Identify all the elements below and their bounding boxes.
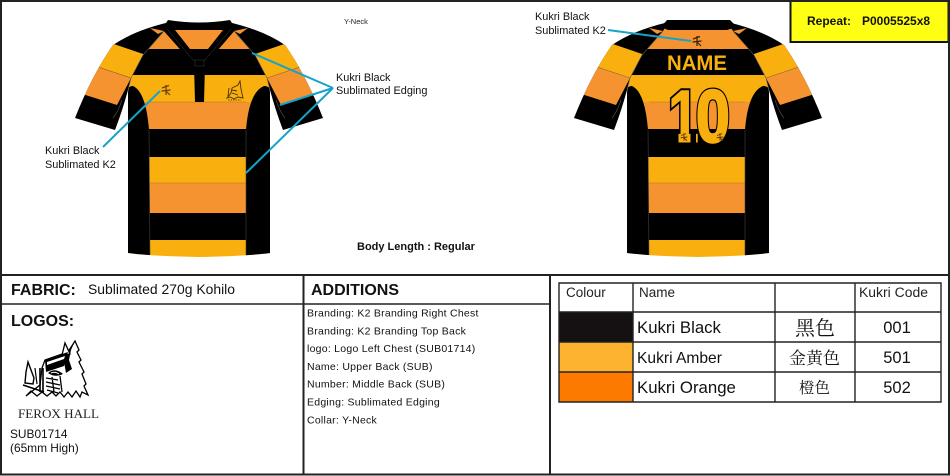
callout: back K2: Sublimated K2 [535, 25, 606, 37]
collar and placket [162, 20, 236, 102]
row: amber: Kukri Amber [637, 350, 722, 367]
number print: 1 [668, 75, 699, 158]
repeat badge [790, 1, 948, 42]
row: orange: 橙色 [799, 376, 830, 398]
neck label: Y-Neck [344, 17, 368, 26]
k2 chest mark [162, 85, 170, 95]
row: black [637, 312, 911, 341]
row: orange: 502 [883, 379, 911, 397]
panel: additions: ADDITIONS [311, 282, 399, 299]
name print: NAME [667, 52, 727, 75]
chest crest [227, 81, 243, 100]
logo name: FEROX HALL [18, 406, 99, 421]
number print: 1 [668, 75, 699, 158]
k2 number marks [681, 133, 723, 141]
body length label: Body Length : Regular [357, 241, 476, 253]
additions list: Edging: Sublimated Edging [307, 396, 440, 408]
colour table [559, 283, 941, 402]
number print: 0 [696, 76, 730, 158]
table header: Colour [566, 285, 606, 300]
row: orange: Kukri Orange [637, 378, 736, 397]
repeat badge: Repeat: [807, 14, 851, 28]
additions list: Collar: Y-Neck [307, 414, 378, 426]
row: orange [637, 376, 911, 398]
callout: edging: Sublimated Edging [336, 85, 427, 97]
row: amber: 501 [883, 349, 911, 367]
number print: 0 [696, 76, 730, 158]
panel: fabric: Sublimated 270g Kohilo [88, 282, 235, 297]
number print [660, 75, 730, 158]
panel: logos [10, 313, 99, 455]
additions list: Branding: K2 Branding Right Chest [307, 308, 479, 320]
panel: additions [307, 282, 479, 426]
callout: front K2: Sublimated K2 [45, 159, 116, 171]
callout: back K2: Kukri Black [535, 11, 590, 23]
additions list: Number: Middle Back (SUB) [307, 379, 445, 391]
panel: fabric [11, 282, 235, 299]
back collar [661, 20, 737, 30]
panel: logos: LOGOS: [11, 313, 74, 330]
callout lines [103, 30, 691, 173]
front jersey [75, 20, 323, 258]
table header: Kukri Code [859, 285, 928, 300]
additions list: Name: Upper Back (SUB) [307, 361, 433, 373]
row: black: Kukri Black [637, 318, 722, 337]
additions list: logo: Logo Left Chest (SUB01714) [307, 343, 476, 355]
row: amber [637, 344, 911, 369]
panel: fabric: FABRIC: [11, 282, 76, 299]
callout: front K2: Kukri Black [45, 145, 100, 157]
row: black: 001 [883, 319, 911, 337]
table header: Name [639, 285, 675, 300]
back jersey [574, 20, 822, 258]
logo code: SUB01714 [10, 427, 68, 441]
callout: edging: Kukri Black [336, 72, 391, 84]
repeat badge: P0005525x8 [862, 14, 930, 28]
additions list [307, 308, 479, 426]
additions list: Branding: K2 Branding Top Back [307, 325, 467, 337]
logo crest [23, 341, 88, 397]
k2 back mark [692, 36, 702, 46]
row: black: 黑色 [795, 312, 835, 341]
row: amber: 金黄色 [789, 344, 840, 369]
logo code: (65mm High) [10, 441, 79, 455]
table header [566, 285, 928, 300]
